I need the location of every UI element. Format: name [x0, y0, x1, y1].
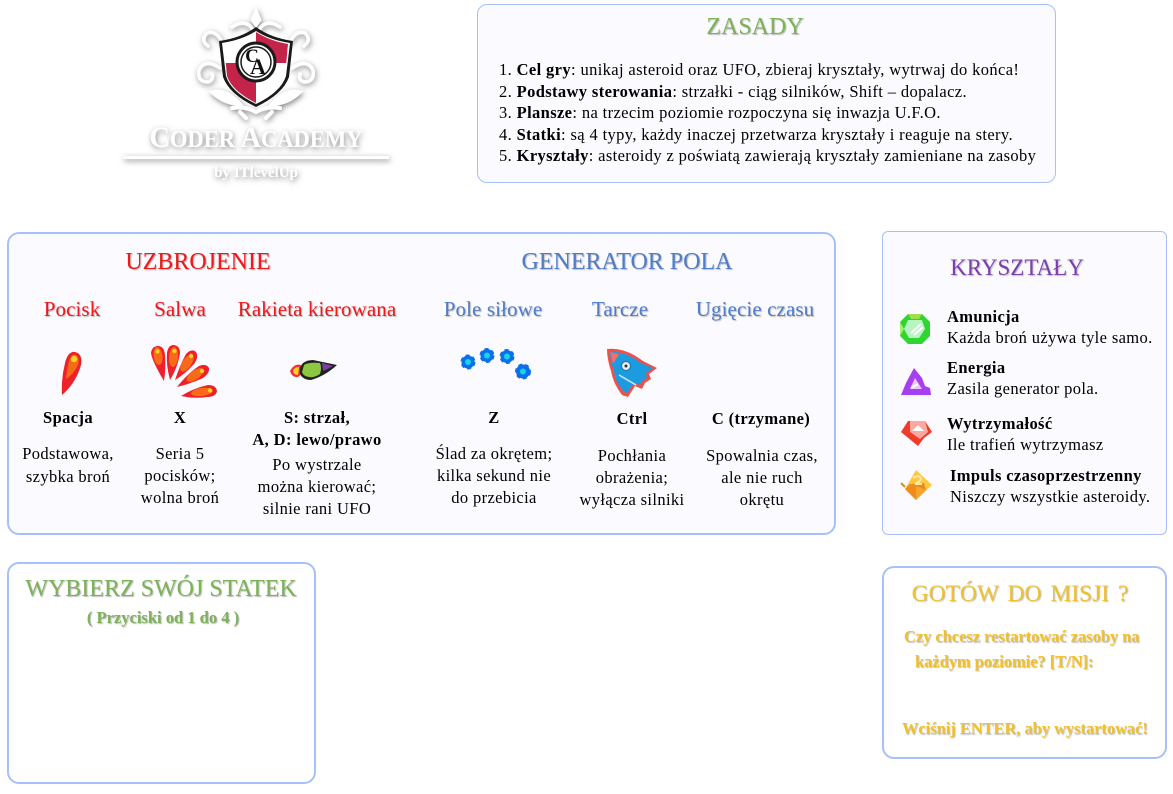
heading: generator pola: GENERATOR POLA	[522, 249, 732, 275]
question: restart: Czy chcesz restartować zasoby na	[904, 627, 1139, 646]
wordmark: CODER ACADEMY	[150, 121, 362, 154]
text: energia: Energia	[947, 358, 1006, 377]
description: ugiecie czasu: Spowalnia czas,	[706, 446, 818, 465]
key: x: X	[174, 408, 186, 427]
rules list: 2. Podstawy sterowania: strzałki - ciąg silników, Shift – dopalacz.	[499, 82, 967, 100]
description: pole silowe: Ślad za okrętem;	[436, 444, 552, 463]
icon: pocisk	[62, 352, 82, 395]
text: energia: Zasila generator pola.	[947, 379, 1099, 398]
icon: amunicja	[900, 314, 930, 344]
panel: zasady	[477, 4, 1056, 183]
panel: wybierz statek	[7, 562, 316, 784]
column: salwa: Salwa	[154, 297, 206, 321]
description: pocisk	[22, 444, 114, 486]
key: s a d	[252, 408, 382, 448]
heading: zasady: ZASADY	[706, 14, 804, 40]
crystal: impuls	[900, 466, 1150, 506]
column: rakieta kierowana: Rakieta kierowana	[238, 297, 396, 321]
shield: C	[245, 46, 259, 67]
logo: Coder Academy	[122, 8, 392, 184]
column: ugiecie czasu	[696, 297, 818, 509]
key: z: Z	[488, 408, 500, 427]
shield	[219, 27, 293, 107]
text: impuls: Impuls czasoprzestrzenny	[950, 466, 1142, 485]
description: pocisk: szybka broń	[26, 467, 110, 486]
crystal: amunicja	[900, 307, 1153, 347]
text: wytrzymalosc	[947, 414, 1104, 454]
column: tarcze	[580, 297, 684, 509]
rules list: 4. Statki: są 4 typy, każdy inaczej przetwarza kryształy i reaguje na stery.	[499, 124, 1013, 144]
description: ugiecie czasu	[706, 446, 818, 509]
heading: uzbrojenie: UZBROJENIE	[125, 249, 271, 275]
description: salwa: Seria 5	[156, 444, 204, 463]
description: tarcze: wyłącza silniki	[580, 490, 684, 509]
text: wytrzymalosc: Ile trafień wytrzymasz	[947, 435, 1104, 454]
prompt: enter: Wciśnij ENTER, aby wystartować!	[902, 719, 1148, 738]
description: tarcze: obrażenia;	[596, 468, 668, 487]
text: amunicja: Każda broń używa tyle samo.	[947, 328, 1153, 347]
wordmark	[123, 121, 389, 181]
description: pole silowe: kilka sekund nie	[437, 466, 551, 485]
description: salwa: pocisków;	[144, 466, 216, 485]
icon: pole silowe	[460, 348, 531, 380]
question: restart	[904, 627, 1140, 672]
text: energia	[947, 358, 1099, 398]
description: pocisk: Podstawowa,	[22, 444, 114, 463]
wordmark: by ITlevelUp	[214, 165, 298, 181]
text: wytrzymalosc: Wytrzymałość	[947, 414, 1053, 433]
key: c: C (trzymane)	[712, 409, 810, 428]
description: rakieta	[258, 455, 376, 518]
heading: krysztaly: KRYSZTAŁY	[950, 255, 1084, 280]
hint: przyciski: ( Przyciski od 1 do 4 )	[87, 608, 239, 627]
column: pole silowe: Pole siłowe	[444, 297, 542, 321]
description: rakieta: można kierować;	[258, 477, 376, 496]
panel: krysztaly	[882, 231, 1167, 535]
icon: energia	[901, 368, 931, 395]
description: ugiecie czasu: okrętu	[740, 490, 784, 509]
column: ugiecie czasu: Ugięcie czasu	[696, 297, 814, 321]
column: pocisk	[22, 297, 114, 486]
icon: tarcze	[607, 348, 657, 397]
key: s a d: A, D: lewo/prawo	[252, 430, 382, 448]
description: salwa	[140, 444, 219, 507]
icon: rakieta	[290, 360, 337, 380]
flourishes	[199, 8, 313, 118]
column: tarcze: Tarcze	[592, 297, 648, 321]
description: tarcze	[580, 446, 684, 509]
heading: wybierz swoj statek: WYBIERZ SWÓJ STATEK	[25, 576, 297, 602]
icon: impuls	[900, 470, 932, 500]
crystal: wytrzymalosc	[901, 414, 1104, 454]
description: pole silowe: do przebicia	[451, 488, 537, 507]
icon: salwa	[151, 345, 217, 398]
text: amunicja: Amunicja	[947, 307, 1020, 326]
rules list: 1. Cel gry: unikaj asteroid oraz UFO, zbieraj kryształy, wytrwaj do końca!	[499, 60, 1019, 79]
key: spacja: Spacja	[43, 408, 93, 427]
description: ugiecie czasu: ale nie ruch	[721, 468, 803, 487]
description: pole silowe	[436, 444, 552, 507]
text: amunicja	[947, 307, 1153, 347]
shield: A	[250, 54, 266, 79]
crystal: energia	[901, 358, 1099, 398]
rules list: 3. Plansze: na trzecim poziomie rozpoczyna się inwazja U.F.O.	[499, 103, 941, 122]
text: impuls: Niszczy wszystkie asteroidy.	[950, 487, 1150, 506]
column: pole silowe	[436, 297, 552, 507]
column: salwa	[140, 297, 219, 507]
column: pocisk: Pocisk	[44, 297, 100, 321]
key: s a d: S: strzał,	[284, 408, 350, 427]
description: tarcze: Pochłania	[598, 446, 666, 465]
description: salwa: wolna broń	[141, 488, 219, 507]
heading: gotow do misji: GOTÓW DO MISJI ?	[912, 581, 1128, 607]
rules list: 5. Kryształy: asteroidy z poświatą zawierają kryształy zamieniane na zasoby	[499, 146, 1036, 165]
column: rakieta kierowana	[238, 297, 398, 518]
description: rakieta: Po wystrzale	[272, 455, 362, 474]
text: impuls	[950, 466, 1150, 506]
description: rakieta: silnie rani UFO	[263, 499, 371, 518]
panel: gotow do misji	[882, 566, 1167, 759]
rules list	[499, 60, 1036, 165]
panel: uzbrojenie i generator pola	[7, 232, 836, 535]
icon: wytrzymalosc	[901, 421, 932, 446]
question: restart: każdym poziomie? [T/N]:	[915, 652, 1093, 671]
key: ctrl: Ctrl	[617, 409, 647, 428]
